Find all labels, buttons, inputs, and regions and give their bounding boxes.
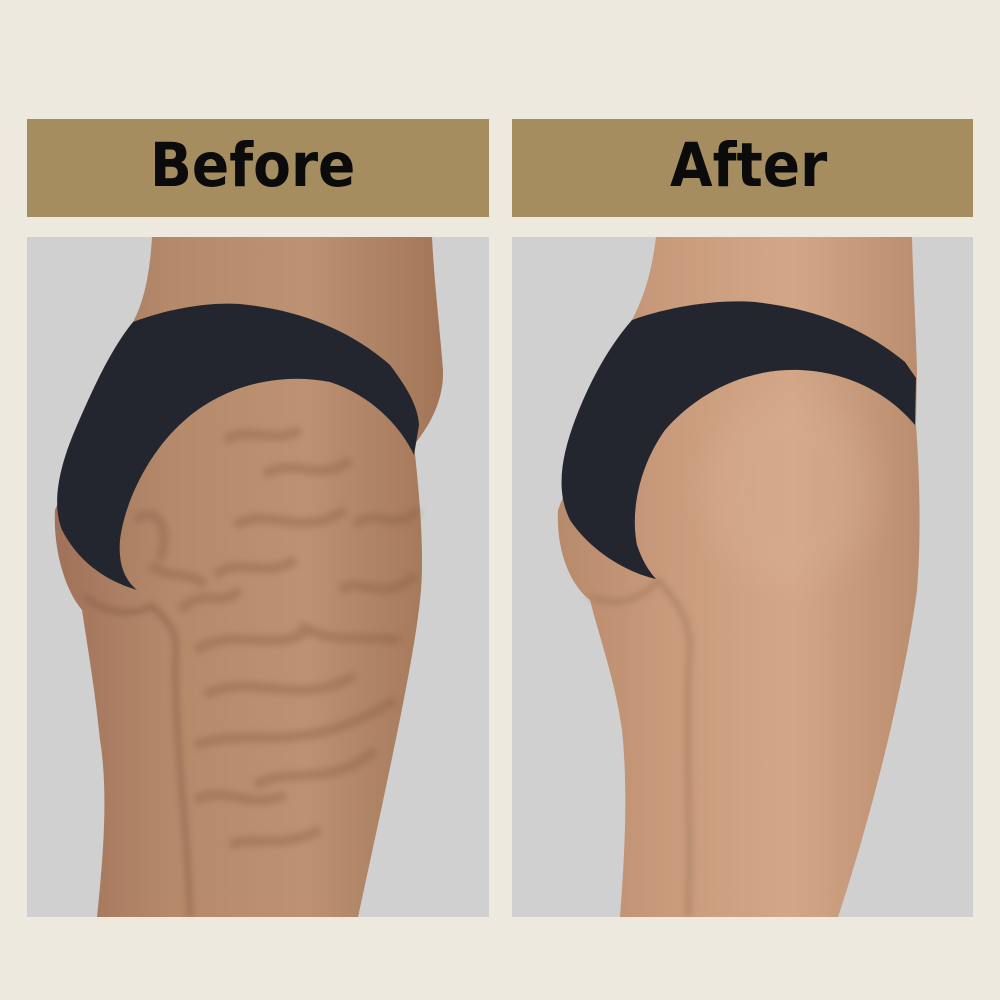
heading: Before (27, 119, 489, 217)
comparison photo panels (27, 237, 973, 917)
panel: after photo (512, 237, 973, 917)
figure: before body (55, 237, 443, 917)
infographic canvas (27, 119, 973, 917)
panel: before photo (27, 237, 489, 917)
shading: buttock crease and leg separation (590, 580, 690, 917)
highlight on skin (839, 455, 858, 522)
underwear: after (562, 301, 916, 579)
heading: Before: Before (150, 130, 355, 200)
underwear: before (57, 304, 419, 590)
cellulite texture (135, 430, 418, 845)
heading: After (512, 119, 973, 217)
figure: after body (558, 237, 920, 917)
heading: After: After (670, 130, 827, 200)
shading: buttock crease and leg separation (84, 596, 190, 917)
